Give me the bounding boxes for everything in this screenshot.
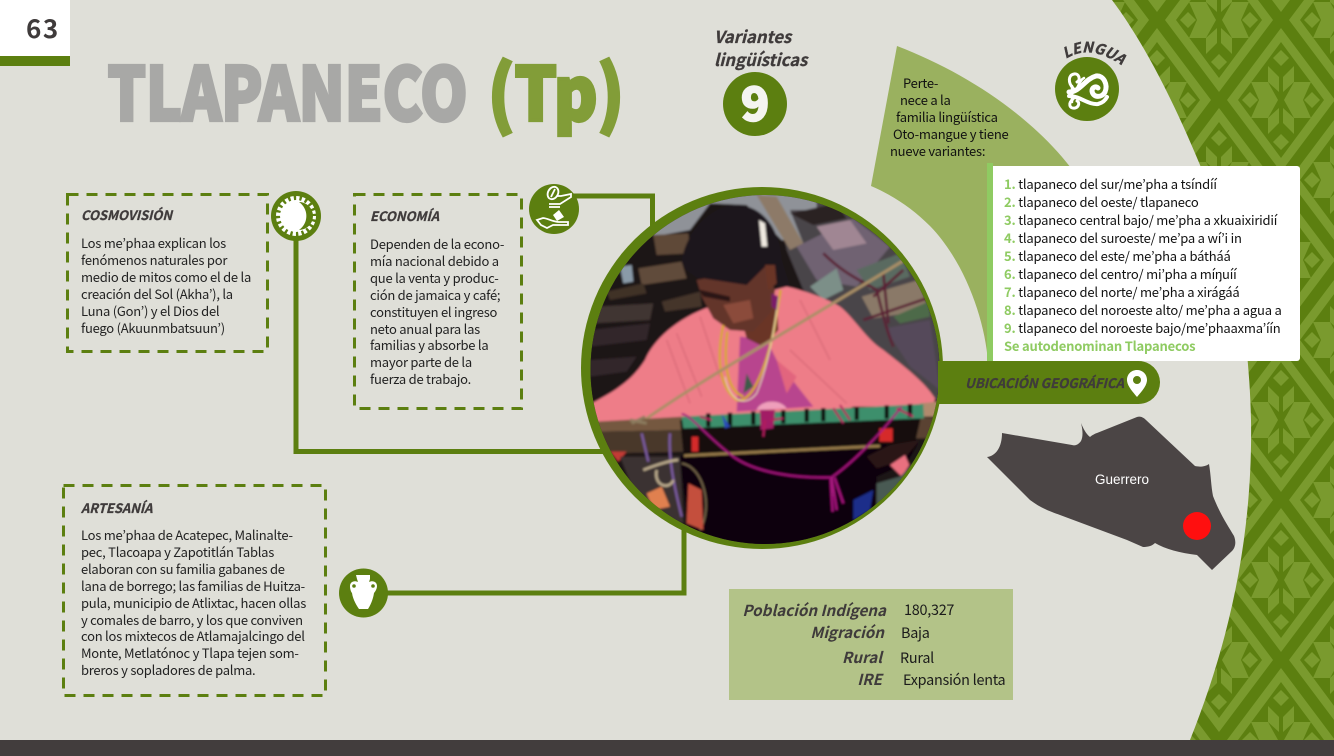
hands bbox=[867, 440, 920, 468]
banner label: UBICACIÓN GEOGRÁFICA bbox=[965, 373, 1124, 392]
body text: Monte, Metlatónoc y Tlapa tejen som- bbox=[81, 643, 299, 662]
body text: neto anual para las bbox=[370, 319, 480, 338]
heading: COSMOVISIÓN bbox=[81, 205, 172, 224]
list card bbox=[993, 166, 1300, 361]
woven band bbox=[682, 404, 924, 428]
panel: artesanía bbox=[62, 484, 327, 697]
hair bbox=[682, 206, 776, 286]
necklaces bbox=[720, 290, 781, 400]
variants: 6. tlapaneco del centro/ mi’pha a míŋuíí bbox=[1004, 264, 1236, 283]
heading: variantes lingüísticas: Variantes bbox=[714, 24, 791, 48]
label: migración: Migración bbox=[810, 621, 884, 643]
body text: pec, Tlacoapa y Zapotitlán Tablas bbox=[81, 542, 274, 561]
body text: fuerza de trabajo. bbox=[370, 369, 471, 388]
variants: 2. tlapaneco del oeste/ tlapaneco bbox=[1004, 192, 1199, 211]
panel: variants list bbox=[987, 163, 1300, 361]
body text: Los me’phaa de Acatepec, Malinalte- bbox=[81, 525, 293, 544]
ground right bbox=[874, 461, 914, 505]
face bbox=[697, 267, 775, 332]
heading: variantes lingüísticas: lingüísticas bbox=[714, 47, 807, 71]
variants: 3. tlapaneco central bajo/ me’pha a xkuaixiridií bbox=[1004, 210, 1277, 229]
banner: ubicación geográfica bbox=[938, 361, 1160, 404]
variants: 1. tlapaneco del sur/me’pha a tsíndíí bbox=[1004, 174, 1217, 193]
heading: ARTESANÍA bbox=[81, 498, 152, 517]
panel: economía bbox=[353, 193, 523, 410]
rope bbox=[640, 261, 903, 423]
heading: ECONOMÍA bbox=[370, 206, 439, 225]
body text: que la venta y produc- bbox=[370, 268, 498, 287]
body text: pula, municipio de Atlixtac, hacen ollas bbox=[81, 593, 306, 612]
badge: 9 variants bbox=[723, 72, 787, 136]
body text bbox=[370, 234, 504, 388]
body text: mayor parte de la bbox=[370, 352, 472, 371]
body text: constituyen el ingreso bbox=[370, 302, 497, 321]
body text bbox=[81, 233, 251, 337]
text: language family: Perte- bbox=[903, 73, 938, 92]
icon: sun and moon bbox=[271, 191, 321, 241]
body text: Luna (Gon’) y el Dios del bbox=[81, 301, 219, 320]
map: Guerrero state: Guerrero bbox=[1095, 472, 1149, 487]
tassels and yarn bbox=[682, 405, 913, 512]
variants: 9. tlapaneco del noroeste bajo/me’phaaxma’íín bbox=[1004, 318, 1281, 337]
label: IRE: IRE bbox=[857, 668, 882, 690]
value: población: 180,327 bbox=[904, 599, 954, 620]
variants: 5. tlapaneco del este/ me’pha a bátháá bbox=[1004, 246, 1231, 265]
left ties and cords bbox=[620, 457, 683, 523]
green tab rule bbox=[0, 56, 70, 66]
backdrop bbox=[590, 202, 936, 526]
page number: 63 bbox=[26, 9, 60, 46]
page number tab bbox=[0, 0, 70, 66]
text: language family: nece a la bbox=[900, 90, 951, 109]
loom sticks bbox=[597, 417, 683, 432]
text: language family bbox=[890, 73, 1008, 160]
photo: woman weaving on backstrap loom bbox=[581, 187, 943, 549]
variants bbox=[1004, 174, 1282, 355]
list accent bar bbox=[987, 163, 993, 361]
title: (Tp) bbox=[488, 36, 624, 142]
label: población: Población Indígena bbox=[742, 599, 886, 621]
heddle stick bbox=[684, 446, 880, 456]
body text: Los me’phaa explican los bbox=[81, 233, 226, 252]
label: rural: Rural bbox=[842, 646, 882, 668]
blouse bbox=[737, 337, 813, 412]
value: IRE: Expansión lenta bbox=[903, 669, 1005, 690]
value: migración: Baja bbox=[901, 622, 930, 643]
body text: con los mixtecos de Atlamajalcingo del bbox=[81, 626, 305, 645]
title: TLAPANECO bbox=[108, 36, 468, 142]
neck bbox=[744, 306, 780, 346]
red tags bbox=[692, 437, 698, 452]
variants: 7. tlapaneco del norte/ me’pha a xirágáá bbox=[1004, 282, 1240, 301]
body text: mía nacional debido a bbox=[370, 251, 499, 270]
body text: breros y sopladores de palma. bbox=[81, 660, 255, 679]
body text: familias y absorbe la bbox=[370, 335, 488, 354]
variants: Se autodenominan Tlapanecos bbox=[1004, 336, 1195, 355]
icon: location pin bbox=[1127, 370, 1147, 397]
variants: 8. tlapaneco del noroeste alto/ me’pha a agua a bbox=[1004, 300, 1282, 319]
panel: cosmovisión bbox=[66, 193, 269, 353]
icon: clay jar bbox=[339, 568, 388, 618]
body text: fenómenos naturales por bbox=[81, 250, 227, 269]
text: language family: familia lingüística bbox=[896, 107, 998, 126]
body text: elaboran con su familia gabanes de bbox=[81, 559, 285, 578]
text: language family: Oto-mangue y tiene bbox=[893, 124, 1008, 143]
garment below loom bbox=[680, 440, 920, 547]
body text: fuego (Akuunmbatsuun’) bbox=[81, 318, 225, 337]
icon: lengua swirl with curved label: LENGUA bbox=[1064, 42, 1127, 66]
sweater bbox=[592, 287, 935, 423]
text: language family: nueve variantes: bbox=[890, 141, 985, 160]
foliage right bbox=[797, 218, 890, 287]
body text: ción de jamaica y café; bbox=[370, 285, 500, 304]
body text: Dependen de la econo- bbox=[370, 234, 504, 253]
heading: variantes lingüísticas bbox=[714, 24, 809, 71]
body text: y comales de barro, y los que conviven bbox=[81, 610, 303, 629]
log pile bbox=[653, 233, 690, 255]
body text: medio de mitos como el de la bbox=[81, 267, 251, 286]
body text: creación del Sol (Akha’), la bbox=[81, 284, 233, 303]
icon: hands with seeds bbox=[529, 184, 579, 234]
body text: lana de borrego; las familias de Huitza- bbox=[81, 576, 305, 595]
variants: 4. tlapaneco del suroeste/ me’pa a wí’i in bbox=[1004, 228, 1242, 247]
body text bbox=[81, 525, 306, 679]
value: rural: Rural bbox=[900, 647, 934, 668]
footer bar bbox=[0, 740, 1334, 756]
panel: demographic data bbox=[729, 589, 1013, 700]
